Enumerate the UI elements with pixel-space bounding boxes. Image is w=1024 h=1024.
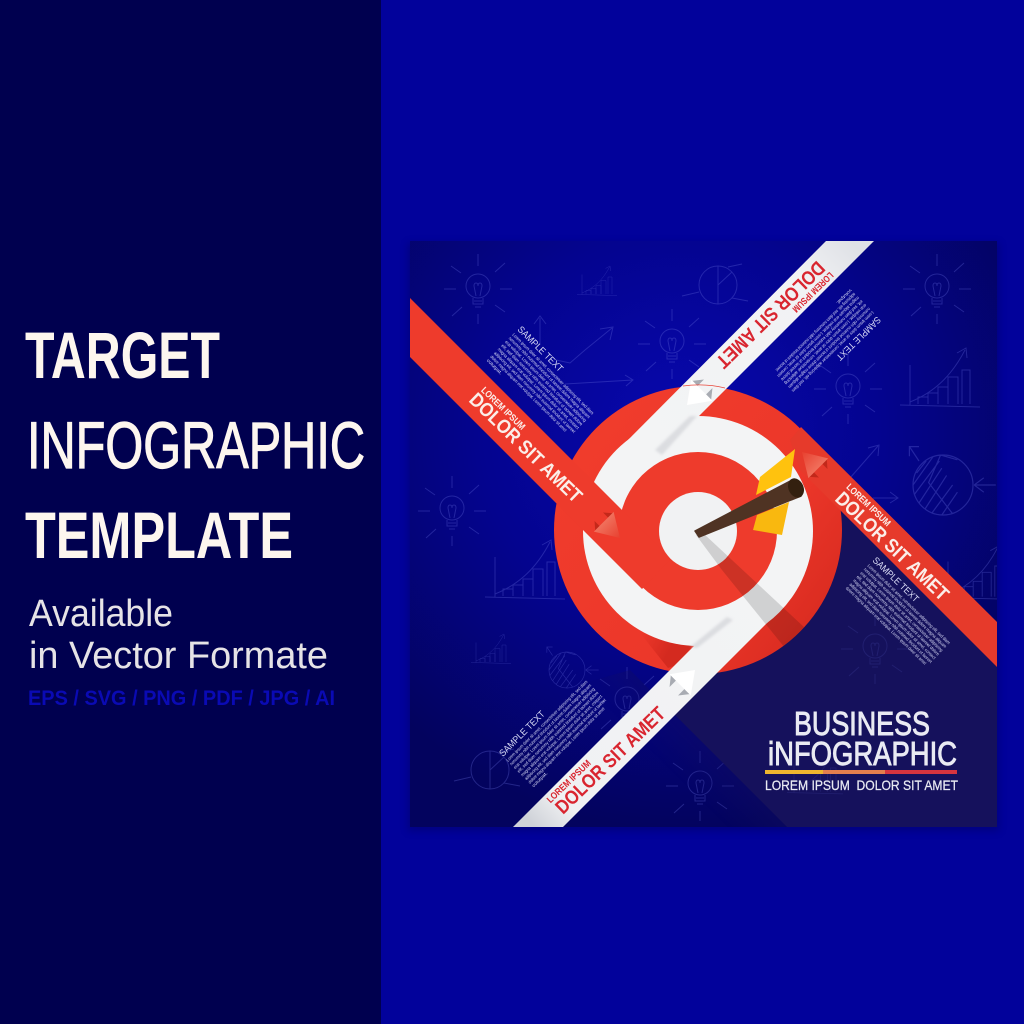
sample text: bottom left: elit, sed diam nonummy nibh euismod tincidunt ut laoreet dolore (516, 690, 600, 774)
sample text: bottom right: nonummy nibh euismod tincidunt ut laoreet dolore magna aliquam (863, 567, 948, 649)
target outer ring (554, 386, 842, 674)
sample text: bottom right: erat volutpat. Lorem ipsum dolor sit amet, consectetuer adipiscing (859, 571, 944, 653)
sample text: top left: elit, sed diam nonummy nibh euismod tincidunt ut laoreet dolore (500, 343, 584, 427)
ribbon text: bottom white: LOREM IPSUM (545, 758, 594, 806)
arrow icon: red left (594, 512, 619, 538)
sample text: bottom left: Lorem ipsum dolor sit amet, consectetuer adipiscing elit, sed diam (505, 679, 589, 763)
business infographic title block (765, 705, 958, 793)
subtitle: available: Available (29, 593, 173, 635)
target white ring (583, 416, 813, 646)
shaded outer ring lower left (650, 637, 692, 668)
arrow icon: white top (687, 380, 712, 405)
ribbon text: left red: DOLOR SIT AMET (465, 389, 586, 507)
fletching bottom (753, 502, 789, 535)
sample text: top left: dolore magna aliquam erat volutpat. Lorem ipsum dolor sit amet (489, 354, 568, 433)
dart (695, 449, 807, 537)
title line 1: BUSINESS (794, 705, 930, 742)
ribbon fold shadow bottom (690, 617, 733, 648)
ribbon: left red (410, 298, 644, 589)
thin red arc on top ribbon (683, 385, 725, 388)
sample text: bottom left: magna aliquam erat volutpat. Lorem ipsum dolor sit amet, consect (520, 694, 604, 777)
shadow polygon lower right (673, 500, 997, 827)
sample text: top right: erat volutpat. Lorem ipsum dolor sit amet, consectetuer adipiscing (783, 303, 868, 386)
target inner red ring (619, 452, 777, 610)
fletching top (756, 449, 795, 495)
target center (659, 492, 737, 570)
subtitle: vector format: in Vector Formate (29, 635, 328, 677)
ribbon text: bottom white (546, 705, 664, 814)
ribbon: bottom white (513, 622, 768, 827)
arrow icon: red right (802, 452, 828, 478)
sample text: bottom right: adipiscing elit, sed diam nonummy nibh euismod tincidunt ut laoreet (848, 582, 934, 664)
sample text: top right: volutpat. (835, 288, 853, 306)
sample text: top left (487, 326, 594, 434)
ribbon: top white (628, 241, 874, 440)
file formats: EPS / SVG / PNG / PDF / JPG / AI (28, 687, 335, 710)
left panel (0, 0, 381, 1024)
ribbon text: top white (718, 260, 834, 370)
ribbon text: top white: DOLOR SIT AMET (711, 256, 829, 372)
tagline: LOREM IPSUM DOLOR SIT AMET (765, 777, 958, 793)
sample text: bottom left: dolore magna aliquam erat volutpat. Lorem ipsum dolor sit amet (527, 706, 606, 785)
shaft end (788, 478, 804, 498)
sample text: bottom left: volutpat. (531, 771, 549, 788)
ribbon: right red (790, 427, 997, 667)
sample text: bottom left (500, 680, 606, 787)
sample text: bottom right: elit, sed diam nonummy nibh euismod tincidunt ut laoreet dolore (856, 574, 941, 657)
ribbon text: left red: LOREM IPSUM (478, 385, 527, 433)
sample text: bottom left: nonummy nibh euismod tincidunt ut laoreet dolore magna aliquam (509, 683, 592, 766)
sample text: top right: adipiscing elit, sed diam nonummy nibh euismod tincidunt ut laoreet (774, 292, 857, 373)
sample text: bottom left: SAMPLE TEXT (497, 709, 548, 759)
sample text: top left: volutpat. (486, 358, 503, 376)
faint doodles on shadow (787, 614, 909, 794)
sample text: bottom right: SAMPLE TEXT (870, 555, 921, 605)
sample text: top right: elit, sed diam nonummy nibh euismod tincidunt ut laoreet dolore (780, 299, 864, 382)
shaft (695, 479, 801, 537)
sample text: top right: magna aliquam erat volutpat. Lorem ipsum dolor sit amet, consect (776, 295, 860, 379)
heading: target: TARGET (25, 318, 220, 392)
sample text: bottom right: dolore magna aliquam erat volutpat. Lorem ipsum dolor sit amet (845, 586, 928, 666)
arrow icon: white bottom (670, 670, 695, 696)
sample text: bottom left: adipiscing elit, sed diam nonummy nibh euismod tincidunt ut laoreet (524, 697, 607, 781)
sample text: bottom left: erat volutpat. Lorem ipsum dolor sit amet, consectetuer adipiscing (512, 686, 596, 770)
poster drop shadow (408, 243, 999, 831)
ribbon text: right red: LOREM IPSUM (844, 482, 893, 529)
sample text: top left: adipiscing elit, sed diam nonummy nibh euismod tincidunt ut laoreet (493, 351, 577, 434)
ribbon text: right red: DOLOR SIT AMET (831, 488, 953, 606)
sample text: top left: Lorem ipsum dolor sit amet, consectetuer adipiscing elit, sed diam (511, 332, 595, 416)
sample text: top right: nonummy nibh euismod tincidunt ut laoreet dolore magna aliquam (787, 307, 871, 389)
sample text: top left: nonummy nibh euismod tincidunt ut laoreet dolore magna aliquam (508, 336, 591, 419)
tricolor rule (765, 770, 957, 774)
sample text: top right: SAMPLE TEXT (833, 314, 883, 362)
heading: infographic: INFOGRAPHIC (27, 408, 365, 482)
title line 2: iNFOGRAPHIC (768, 735, 957, 772)
target and ribbons (410, 241, 997, 827)
sample text: bottom right: magna aliquam erat volutpat. Lorem ipsum dolor sit amet, consect (852, 578, 937, 661)
heading: template: TEMPLATE (25, 498, 293, 572)
ribbon text: bottom white: DOLOR SIT AMET (551, 703, 670, 819)
arrow shadow (696, 533, 805, 648)
sample text: top left: SAMPLE TEXT (515, 324, 565, 375)
sample text: top right: Lorem ipsum dolor sit amet, consectetuer adipiscing elit, sed diam (791, 310, 875, 393)
ribbon text: top white: LOREM IPSUM (790, 269, 835, 314)
sample text: top left: magna aliquam erat volutpat. Lorem ipsum dolor sit amet, consect (497, 347, 580, 431)
doodle icons background (418, 254, 1011, 821)
poster panel (410, 241, 1011, 827)
sample text: bottom right: Lorem ipsum dolor sit amet, consectetuer adipiscing elit, sed diam (866, 563, 951, 645)
sample text: top left: erat volutpat. Lorem ipsum dolor sit amet, consectetuer adipiscing (504, 339, 588, 423)
ribbon fold shadow top (655, 416, 697, 455)
